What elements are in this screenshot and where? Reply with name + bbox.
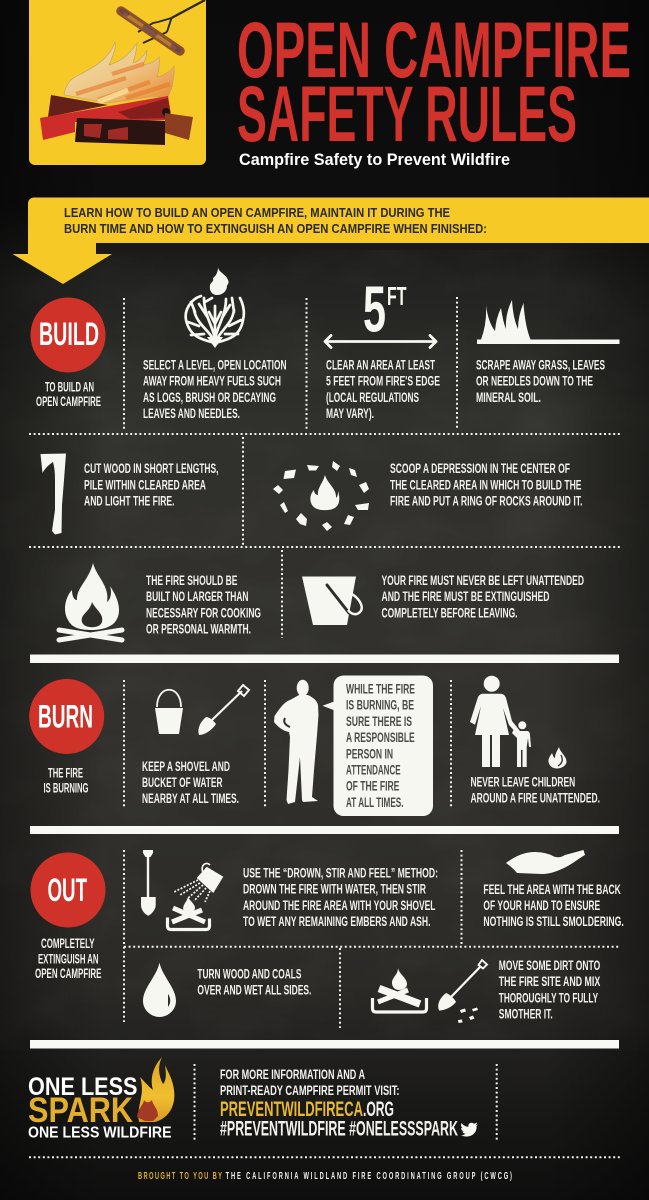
text: cut wood (84, 461, 218, 509)
callout: responsible person: A RESPONSIBLE (346, 730, 415, 745)
text: scrape away (476, 357, 605, 405)
panel: out section (30, 850, 624, 1028)
logo: one less spark (28, 1057, 174, 1142)
text: fire size: OR PERSONAL WARMTH. (146, 621, 251, 636)
callout: responsible person (322, 676, 433, 816)
icon: bucket (155, 690, 183, 734)
icon: grass on soil (477, 300, 620, 344)
burn caption: IS BURNING (44, 781, 88, 796)
logo: one less spark: ONE LESS WILDFIRE (28, 1124, 172, 1142)
text: never leave children: NEVER LEAVE CHILDREN (470, 775, 575, 790)
icon: water drop (143, 962, 176, 1017)
link: website: .ORG (363, 1098, 394, 1121)
icon: axe (40, 454, 66, 534)
credit line: BROUGHT TO YOU BY (138, 1169, 222, 1181)
icon: campfire (59, 563, 122, 640)
text: move dirt: SMOTHER IT. (499, 1006, 553, 1021)
text: more information: FOR MORE INFORMATION AND A (220, 1067, 365, 1082)
icon: tipped bucket (302, 576, 362, 625)
icon: upright shovel (141, 850, 156, 916)
banner text: LEARN HOW TO BUILD AN OPEN CAMPFIRE, MAINTAIN IT DURING THE (64, 206, 450, 220)
text: clear area: CLEAR AN AREA AT LEAST (326, 357, 436, 372)
icon: bush with flame (186, 267, 244, 348)
icon: five feet arrow: 5 (363, 272, 386, 346)
logo: one less spark: ONE LESS (28, 1073, 138, 1101)
banner text (64, 206, 487, 236)
subtitle: Campfire Safety to Prevent Wildfire (239, 151, 510, 169)
text: drown stir feel (243, 866, 438, 929)
text: fire size: THE FIRE SHOULD BE (146, 573, 238, 588)
icon: five feet arrow: FT (387, 281, 407, 311)
text: select location: AS LOGS, BRUSH OR DECAYING (143, 390, 276, 405)
text: never unattended: AND THE FIRE MUST BE EXTINGUISHED (382, 589, 550, 604)
text: keep shovel (142, 759, 239, 806)
out caption (35, 936, 102, 981)
text: fire size (146, 573, 261, 636)
callout: responsible person: WHILE THE FIRE (346, 681, 415, 696)
burn caption (44, 766, 88, 796)
icon: shovel (198, 685, 249, 735)
icon: shovel with dirt (438, 960, 487, 1023)
icon: fork and roasting sausage (121, 0, 205, 51)
badge: build: BUILD (39, 316, 99, 352)
callout: responsible person: IS BURNING, BE (346, 698, 414, 713)
callout: responsible person: ATTENDANCE (346, 763, 401, 778)
icon: flames (64, 42, 174, 103)
build caption: OPEN CAMPFIRE (36, 394, 101, 409)
text: drown stir feel: AROUND THE FIRE AREA WITH YOUR SHOVEL (243, 898, 436, 913)
callout: responsible person: AT ALL TIMES. (346, 795, 404, 810)
text: more information: PRINT-READY CAMPFIRE PERMIT VISIT: (220, 1083, 400, 1098)
text: cut wood: AND LIGHT THE FIRE. (84, 494, 174, 509)
hashtags: #PREVENTWILDFIRE #ONELESSSPARK (220, 1117, 458, 1140)
text: feel the area (483, 882, 624, 929)
text: keep shovel: NEARBY AT ALL TIMES. (142, 791, 239, 806)
icon: five feet arrow (325, 272, 436, 348)
text: more information (220, 1067, 400, 1098)
text: cut wood: PILE WITHIN CLEARED AREA (84, 478, 206, 492)
panel: burn section (29, 676, 600, 816)
text: keep shovel: KEEP A SHOVEL AND (142, 759, 230, 774)
callout: responsible person: SURE THERE IS (346, 714, 412, 729)
icon: fire ring of rocks (273, 461, 369, 531)
text: drown stir feel: USE THE “DROWN, STIR AND FEEL” METHOD: (243, 866, 438, 881)
callout: responsible person: PERSON IN (346, 746, 393, 761)
text: never leave children (470, 775, 600, 806)
link: website: PREVENTWILDFIRECA (220, 1098, 363, 1121)
divider bar (30, 1040, 619, 1048)
panel: footer (28, 1057, 620, 1181)
credit line: THE CALIFORNIA WILDLAND FIRE COORDINATING GROUP (CWCG) (226, 1169, 512, 1181)
text: select location (143, 357, 286, 421)
icon: logs (40, 95, 193, 145)
badge: burn (29, 679, 104, 754)
text: clear area: (LOCAL REGULATIONS (326, 390, 419, 405)
icon: standing person (274, 680, 318, 804)
text: keep shovel: BUCKET OF WATER (142, 775, 223, 790)
badge: build (30, 298, 106, 372)
text: drown stir feel: DROWN THE FIRE WITH WATER, THEN STIR (243, 882, 426, 897)
text: turn wood: TURN WOOD AND COALS (197, 966, 301, 981)
text: cut wood: CUT WOOD IN SHORT LENGTHS, (84, 461, 218, 476)
text: select location: LEAVES AND NEEDLES. (143, 406, 240, 421)
text: fire size: BUILT NO LARGER THAN (146, 589, 248, 604)
text: fire size: NECESSARY FOR COOKING (146, 605, 261, 620)
icon: small flame (548, 747, 567, 768)
divider bar (30, 826, 619, 834)
out caption: COMPLETELY (41, 936, 95, 951)
build caption (36, 380, 101, 409)
text: scoop depression (390, 461, 582, 509)
text: never unattended (382, 573, 584, 620)
badge: out (30, 852, 106, 928)
icon: open hand (506, 850, 585, 874)
banner arrow (12, 198, 649, 284)
title (237, 6, 631, 158)
badge: burn: BURN (38, 699, 93, 735)
text: never unattended: COMPLETELY BEFORE LEAVING. (382, 605, 518, 620)
icon: pouring water on fire (168, 863, 223, 930)
text: move dirt: THE FIRE SITE AND MIX (499, 974, 600, 989)
text: clear area: MAY VARY). (326, 406, 374, 421)
text: scrape away: MINERAL SOIL. (476, 390, 541, 405)
text: clear area (326, 357, 440, 421)
panel: yellow campfire card (29, 0, 206, 165)
text: select location: AWAY FROM HEAVY FUELS SUCH (143, 374, 281, 389)
text: clear area: 5 FEET FROM FIRE'S EDGE (326, 374, 440, 389)
text: drown stir feel: TO WET ANY REMAINING EMBERS AND ASH. (243, 914, 430, 929)
burn caption: THE FIRE (48, 766, 83, 781)
divider bar (30, 654, 619, 663)
icon: woman and child (470, 676, 531, 767)
text: turn wood: OVER AND WET ALL SIDES. (197, 982, 311, 997)
text: select location: SELECT A LEVEL, OPEN LOCATION (143, 357, 286, 372)
text: move dirt (499, 958, 600, 1021)
out caption: OPEN CAMPFIRE (35, 966, 102, 981)
icon: twitter bird (461, 1122, 478, 1137)
text: turn wood (197, 966, 311, 997)
panel: build section (29, 267, 620, 640)
logo: one less spark: SPARK (28, 1091, 133, 1130)
icon: logs in tray (372, 968, 426, 1012)
out caption: EXTINGUISH AN (38, 951, 98, 966)
badge: out: OUT (48, 872, 87, 908)
build caption: TO BUILD AN (45, 380, 94, 394)
callout: responsible person: OF THE FIRE (346, 779, 399, 794)
banner text: BURN TIME AND HOW TO EXTINGUISH AN OPEN CAMPFIRE WHEN FINISHED: (64, 222, 487, 236)
